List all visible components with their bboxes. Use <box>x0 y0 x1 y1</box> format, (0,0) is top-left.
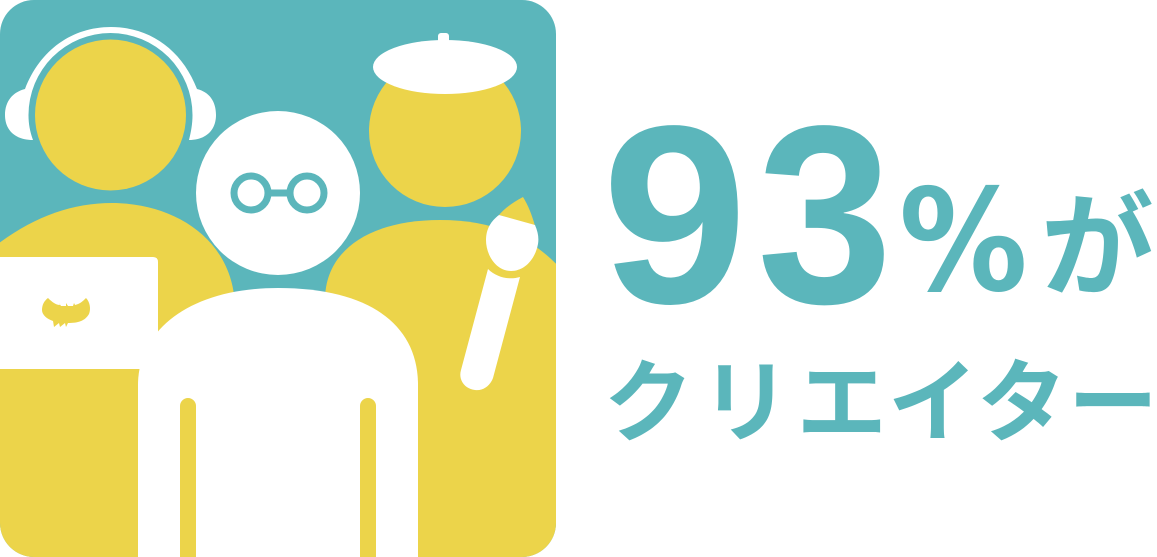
headline: 93%が: が <box>1041 184 1154 310</box>
icon: glasses <box>234 176 324 210</box>
paintbrush <box>460 197 538 390</box>
icon: cat logo on laptop <box>42 298 90 327</box>
laptop <box>0 257 158 369</box>
headline: 93%が: % <box>899 159 1028 324</box>
right person with beret <box>325 33 560 557</box>
panel: creators illustration <box>0 0 560 557</box>
subheading: クリエイター: クリエイター <box>604 354 1157 454</box>
headline: 93%が <box>602 73 1154 357</box>
headline: 93%が: 9 <box>602 73 748 357</box>
center person with glasses <box>138 111 418 557</box>
left person with headphones <box>0 27 235 557</box>
headline: 93%が: 3 <box>757 73 893 357</box>
